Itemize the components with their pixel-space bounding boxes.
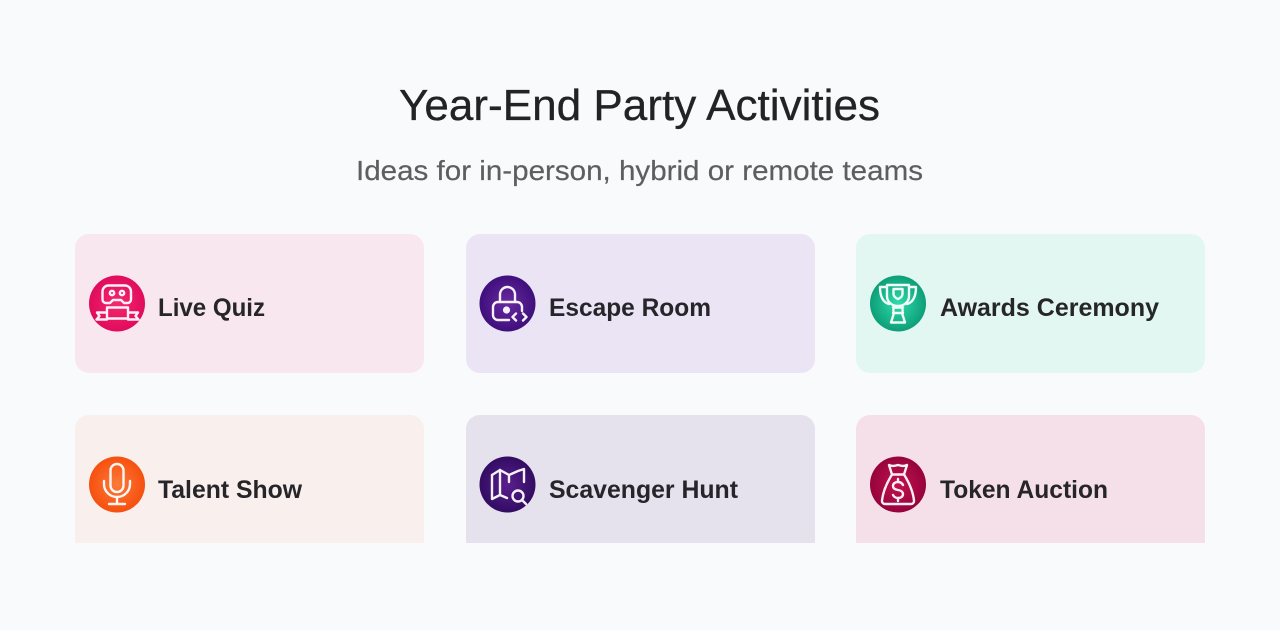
panel: escape room xyxy=(466,234,815,373)
icon: trophy xyxy=(870,276,926,332)
subtitle: Ideas for in-person, hybrid or remote teams xyxy=(356,155,923,186)
icon: robot on podium xyxy=(89,276,145,332)
panel: live quiz xyxy=(75,234,424,373)
icon: money bag xyxy=(870,456,926,512)
label: talent show: Talent Show xyxy=(158,476,303,504)
label: awards ceremony: Awards Ceremony xyxy=(940,294,1159,322)
title: Year-End Party Activities xyxy=(399,81,880,130)
label: escape room: Escape Room xyxy=(549,294,711,322)
icon: map with magnifier xyxy=(480,456,536,512)
label: token auction: Token Auction xyxy=(940,476,1108,504)
panel: token auction xyxy=(856,415,1205,543)
icon: padlock with code xyxy=(480,276,536,332)
label: scavenger hunt: Scavenger Hunt xyxy=(549,476,739,504)
icon: microphone xyxy=(89,456,145,512)
panel: awards ceremony xyxy=(856,234,1205,373)
panel: scavenger hunt xyxy=(466,415,815,543)
panel: talent show xyxy=(75,415,424,543)
label: live quiz: Live Quiz xyxy=(158,294,265,322)
